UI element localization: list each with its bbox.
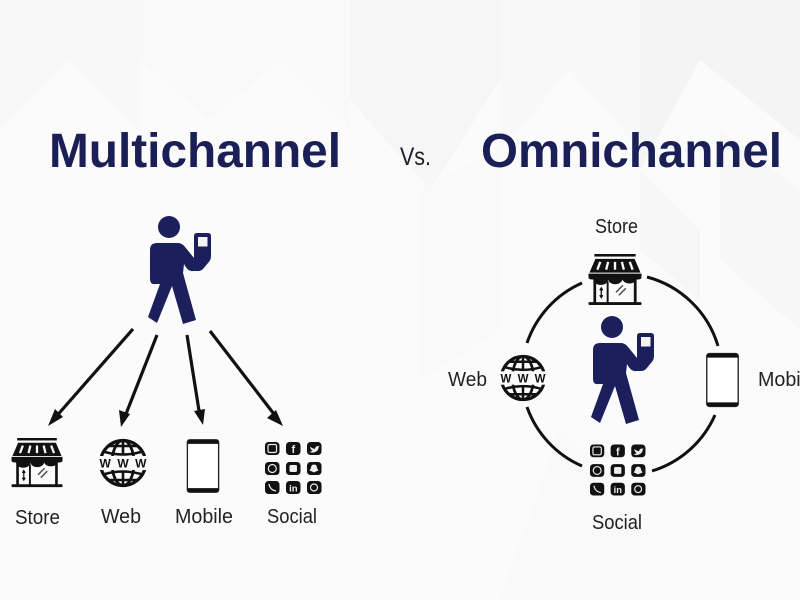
icon: shopper	[148, 216, 211, 324]
icon: store	[12, 438, 62, 487]
omnichannel diagram	[448, 216, 800, 534]
title: Multichannel: Multichannel	[49, 125, 341, 178]
label: Mobile: Mobile	[175, 506, 233, 528]
icon: mobile phone	[707, 354, 738, 406]
label: Store: Store	[15, 507, 60, 529]
label: Social: Social	[267, 506, 317, 528]
icon: web globe	[499, 356, 547, 400]
icon: store	[588, 254, 642, 305]
icon: social grid	[265, 442, 322, 494]
label: Vs.: Vs.	[400, 143, 431, 171]
icon: shopper	[591, 316, 654, 424]
label: Social: Social	[592, 512, 642, 534]
icon: web globe	[98, 440, 148, 486]
arrows to channels	[48, 329, 283, 427]
label: Web: Web	[101, 506, 141, 528]
icon: social grid	[590, 444, 645, 496]
icon: mobile phone	[187, 440, 219, 492]
multichannel diagram	[12, 216, 322, 529]
label: Web: Web	[448, 369, 487, 391]
circular connector	[527, 277, 718, 471]
title: Omnichannel: Omnichannel	[481, 125, 782, 178]
label: Store: Store	[595, 216, 638, 238]
